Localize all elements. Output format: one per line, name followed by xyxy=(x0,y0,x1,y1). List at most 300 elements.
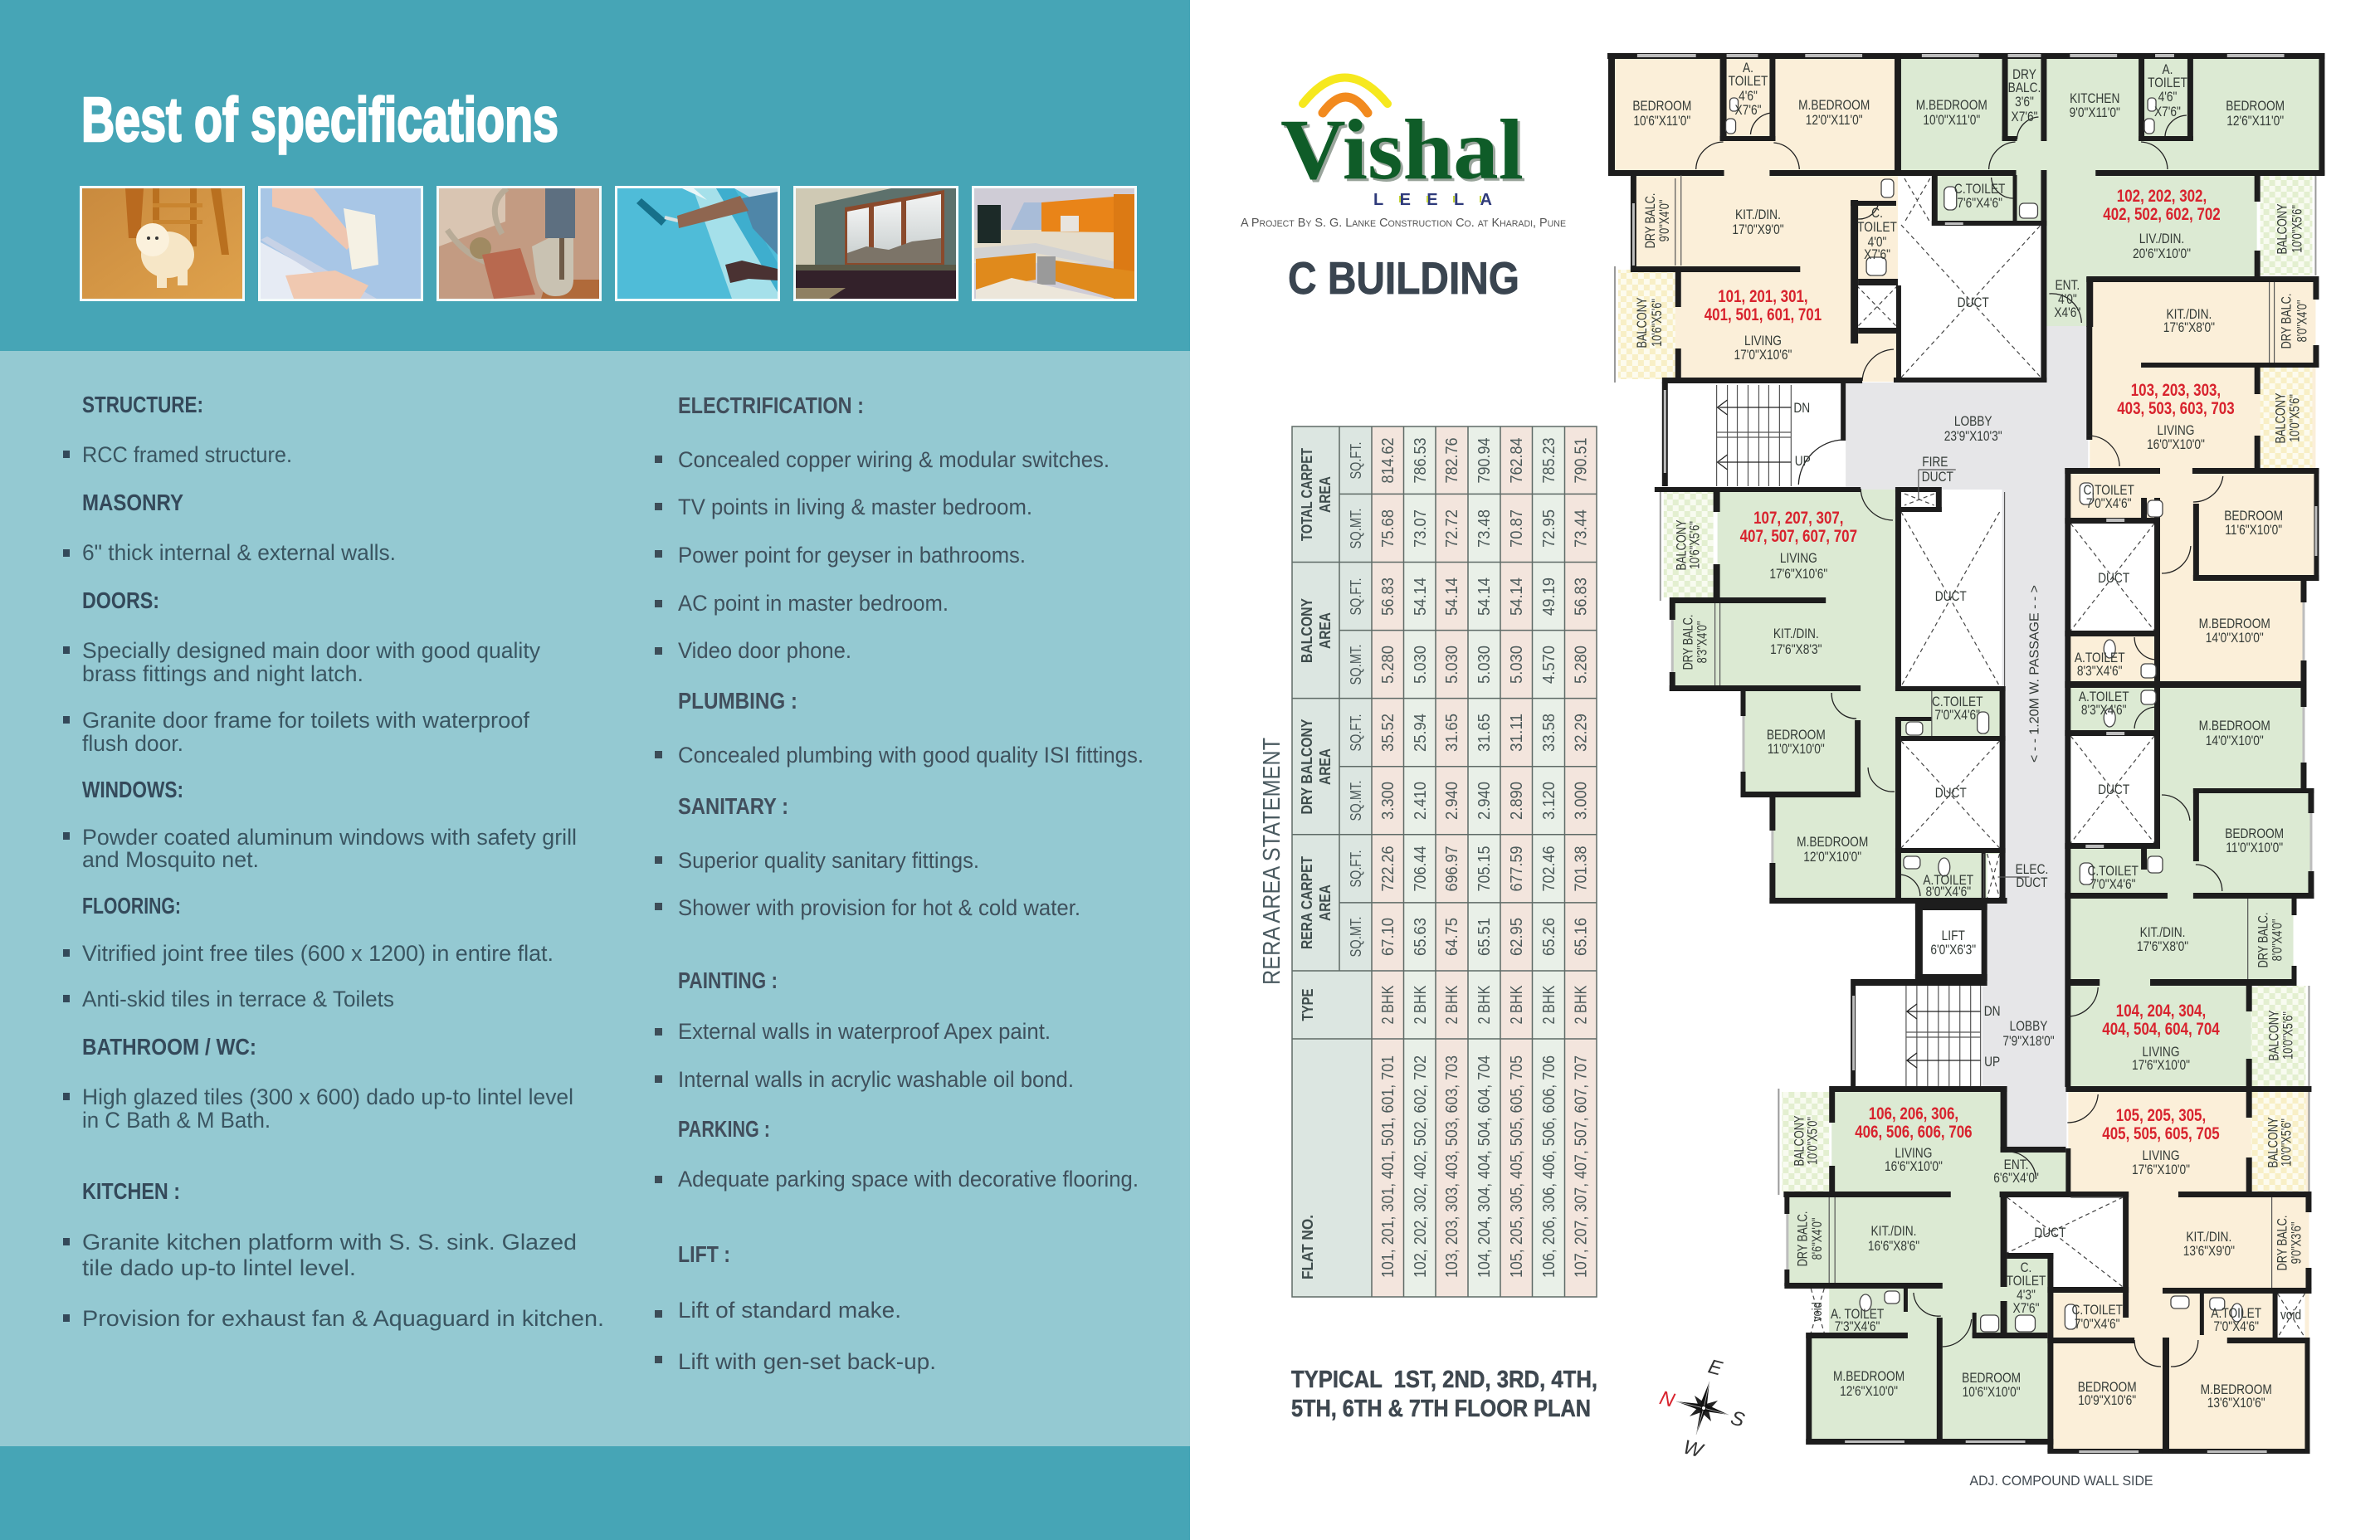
panel: specifications list background xyxy=(0,351,1190,1446)
room label: common toilet xyxy=(2071,1303,2123,1332)
specifications: right column xyxy=(655,392,1144,1374)
plan: windows xyxy=(1632,54,2317,1453)
room label: dry balcony: 8'0"X4'0" xyxy=(2270,919,2285,961)
plan: lobby and passage floor xyxy=(1846,326,2088,1148)
room label: common toilet: 4'0" xyxy=(1868,235,1886,250)
room label: living: 16'0"X10'0" xyxy=(2147,437,2205,452)
room label: balcony: BALCONY xyxy=(1634,298,1650,348)
room label: balcony: BALCONY xyxy=(2266,1011,2282,1060)
callout: fire duct xyxy=(1919,455,1956,500)
spec item: parking: Adequate parking space with decorative flooring. xyxy=(678,1167,1139,1192)
heading: windows: WINDOWS: xyxy=(82,777,183,802)
spec item: RCC: RCC framed structure. xyxy=(82,442,292,467)
room label: common toilet xyxy=(1932,694,1983,723)
flat numbers: 103 series: 103, 203, 303, xyxy=(2131,381,2221,401)
room label: dry balcony: 8'0"X4'0" xyxy=(2295,300,2310,342)
plan: balconies xyxy=(1615,175,2315,1195)
room label: kitchen dining: 17'0"X9'0" xyxy=(1732,222,1784,237)
table: row 102: 5.030 xyxy=(1412,646,1430,684)
room label: dry balcony xyxy=(1680,615,1710,670)
table: row 104: 54.14 xyxy=(1475,578,1494,616)
spec item: internal walls: Internal walls in acrylic washable oil bond. xyxy=(678,1067,1074,1092)
spec item: door frame: flush door. xyxy=(82,731,183,756)
table: row 104: 2 BHK xyxy=(1475,985,1494,1024)
room label: common toilet: 7'0"X4'6" xyxy=(2086,496,2132,511)
table: row 105: 2.890 xyxy=(1508,782,1526,820)
room label: kitchen dining: KIT./DIN. xyxy=(2186,1230,2231,1245)
room label: dry balcony xyxy=(2008,67,2041,124)
table: row 103: 31.65 xyxy=(1443,714,1461,752)
photo: switch installation xyxy=(258,186,423,301)
room label: kitchen dining: 13'6"X9'0" xyxy=(2183,1244,2235,1259)
flat numbers: 102 series xyxy=(2103,187,2221,225)
room label: attached toilet xyxy=(2079,690,2129,718)
room label: dry balcony: BALC. xyxy=(2008,80,2041,95)
spec item: main door: Specially designed main door with good quality xyxy=(82,638,540,663)
spec item: exhaust: Provision for exhaust fan & Aquaguard in kitchen. xyxy=(82,1306,604,1331)
room label: lift xyxy=(1930,928,1976,958)
table: column headers: SQ.MT. xyxy=(1348,644,1364,685)
room label: living: LIVING xyxy=(1895,1146,1932,1161)
room label: attached toilet: 8'0"X4'6" xyxy=(1925,885,1971,899)
table: column headers: BALCONY xyxy=(1299,598,1315,663)
room label: bedroom xyxy=(1632,99,1691,129)
logo: wordmark shadow: Vishal xyxy=(1283,105,1526,200)
room label: kitchen dining: KIT./DIN. xyxy=(1773,626,1819,641)
spec item: door frame: Granite door frame for toilets with waterproof xyxy=(82,708,529,733)
room label: balcony: 10'0"X5'6" xyxy=(2280,1011,2296,1060)
table: row 101: 67.10 xyxy=(1379,918,1397,956)
room label: bedroom: BEDROOM xyxy=(1632,99,1691,114)
table: row 105: 31.11 xyxy=(1508,714,1526,752)
table: row 106 xyxy=(1540,438,1558,1278)
plan: unit 104 floor xyxy=(2068,685,2311,1089)
room label: master bedroom: M.BEDROOM xyxy=(1916,98,1987,113)
spec item: kitchen platform xyxy=(63,1230,577,1280)
heading: flooring: FLOORING: xyxy=(82,893,181,919)
table: row 102: 65.63 xyxy=(1412,918,1430,956)
room label: attached toilet: 8'3"X4'6" xyxy=(2081,703,2127,718)
spec item: kitchen platform: tile dado up-to lintel level. xyxy=(82,1255,356,1280)
table: row 106: 3.120 xyxy=(1540,782,1558,820)
spec item: AC: AC point in master bedroom. xyxy=(678,591,949,616)
flat numbers: 106 series: 106, 206, 306, xyxy=(1869,1104,1958,1124)
room label: dry balcony: DRY BALC. xyxy=(1795,1211,1811,1266)
table: column headers: SQ.MT. xyxy=(1348,508,1364,549)
spec item: gen-set: Lift with gen-set back-up. xyxy=(678,1349,936,1374)
spec item: TV: TV points in living & master bedroom. xyxy=(678,495,1032,519)
room label: balcony: BALCONY xyxy=(1674,520,1690,570)
room label: bedroom xyxy=(2224,509,2283,538)
table: header background xyxy=(1292,426,1372,1297)
room label: lobby: 23'9"X10'3" xyxy=(1944,429,2002,444)
room label: lobby: LOBBY xyxy=(2010,1019,2047,1034)
table: row 105: 70.87 xyxy=(1508,509,1526,548)
label: void: void xyxy=(1810,1302,1826,1322)
room label: dry balcony: DRY BALC. xyxy=(1680,615,1696,670)
room label: living: 17'6"X10'0" xyxy=(2132,1162,2190,1177)
table: row 102: 786.53 xyxy=(1412,438,1430,483)
plan: unit 107 floor xyxy=(1673,490,2002,900)
plan: stairs xyxy=(1717,385,1981,1086)
table: column headers: AREA xyxy=(1317,476,1334,513)
photo: aluminium windows xyxy=(793,186,958,301)
spec item: sanitary fittings: Superior quality sanitary fittings. xyxy=(678,848,979,873)
room label: lobby xyxy=(1944,414,2002,444)
table: row 105: 762.84 xyxy=(1508,438,1526,483)
title: Best of specifications: Best of specifications xyxy=(81,85,558,154)
logo: orange arc xyxy=(1323,97,1368,113)
table: row 106: 702.46 xyxy=(1540,846,1558,891)
table: row 103: 2.940 xyxy=(1443,782,1461,820)
table: row 101: 2 BHK xyxy=(1379,985,1397,1024)
floor plan xyxy=(1607,53,2324,1454)
table: row stripes xyxy=(1372,426,1597,1297)
room label: bedroom: BEDROOM xyxy=(2225,826,2284,841)
room label: common toilet xyxy=(2087,864,2139,892)
room label: kitchen dining: KIT./DIN. xyxy=(2140,925,2185,940)
room label: living dining xyxy=(2133,231,2191,261)
spec item: lift make: Lift of standard make. xyxy=(678,1298,901,1323)
room label: balcony: 10'6"X5'6" xyxy=(1687,521,1703,569)
room label: bedroom: 10'6"X11'0" xyxy=(1633,114,1690,129)
table: column headers: SQ.FT. xyxy=(1348,850,1364,888)
table: row 103: 103, 203, 303, 403, 503, 603, 703 xyxy=(1443,1055,1461,1278)
duct label: DUCT xyxy=(2098,782,2130,797)
flat numbers: 107 series xyxy=(1740,509,1857,547)
table: row 105: 2 BHK xyxy=(1508,985,1526,1024)
room label: entrance: 6'6"X4'0" xyxy=(1993,1171,2039,1186)
plan: sanitary fixtures xyxy=(1726,98,2243,1332)
flat numbers: 106 series: 406, 506, 606, 706 xyxy=(1855,1123,1973,1143)
flat numbers: 106 series xyxy=(1855,1104,1973,1143)
room label: dry balcony: DRY BALC. xyxy=(2279,294,2295,348)
room label: living: LIVING xyxy=(1780,551,1817,566)
panel: specifications background xyxy=(0,0,1190,1540)
table: row 103: 72.72 xyxy=(1443,509,1461,548)
room label: common toilet: C.TOILET xyxy=(2071,1303,2123,1318)
room label: attached toilet: A.TOILET xyxy=(2079,690,2129,704)
callout: electrical duct: ELEC. xyxy=(2016,862,2048,877)
heading: structure: STRUCTURE: xyxy=(82,392,203,417)
room label: balcony: BALCONY xyxy=(2273,393,2289,443)
room label: attached toilet xyxy=(2075,651,2125,679)
table: row 103 xyxy=(1443,438,1461,1278)
table: row 104: 73.48 xyxy=(1475,509,1494,548)
icon: compass: E xyxy=(1706,1355,1725,1381)
table: row 106: 49.19 xyxy=(1540,578,1558,616)
room label: common toilet xyxy=(2007,1260,2046,1316)
room label: living: 17'6"X10'6" xyxy=(1769,567,1827,582)
room label: dry balcony: 3'6" xyxy=(2015,95,2034,110)
table: column headers: SQ.FT. xyxy=(1348,714,1364,752)
photo strip xyxy=(80,186,1137,301)
duct label: DUCT xyxy=(1935,589,1967,604)
room label: common toilet: C. xyxy=(1871,206,1883,221)
table: row 104 xyxy=(1475,438,1494,1278)
spec item: video door phone: Video door phone. xyxy=(678,638,851,663)
table: row 106: 4.570 xyxy=(1540,646,1558,684)
table: row 105 xyxy=(1508,438,1526,1278)
table: row 102: 2 BHK xyxy=(1412,985,1430,1024)
spec item: windows: Powder coated aluminum windows with safety grill xyxy=(82,825,577,850)
table: row 101: 101, 201, 301, 401, 501, 601, 701 xyxy=(1379,1055,1397,1278)
room label: attached toilet: A.TOILET xyxy=(2075,651,2125,665)
room label: living xyxy=(2132,1045,2190,1073)
room label: master bedroom: 12'0"X10'0" xyxy=(1803,850,1861,865)
table: row 107: 107, 207, 307, 407, 507, 607, 707 xyxy=(1572,1055,1590,1278)
room label: living xyxy=(1769,551,1827,582)
flat numbers: 107 series: 407, 507, 607, 707 xyxy=(1740,527,1857,547)
caption: typical floor plan xyxy=(1291,1367,1597,1422)
table: row 104: 2.940 xyxy=(1475,782,1494,820)
flat numbers: 107 series: 107, 207, 307, xyxy=(1753,509,1844,529)
room label: kitchen dining: 16'6"X8'6" xyxy=(1868,1239,1919,1254)
table: column headers: SQ.FT. xyxy=(1348,441,1364,480)
table: row 102: 73.07 xyxy=(1412,509,1430,548)
plan: unit 103 floor xyxy=(2068,279,2315,685)
plan: thin partitions xyxy=(1675,175,2275,1288)
room label: dry balcony: DRY xyxy=(2012,67,2036,82)
label: stairs down: DN xyxy=(1984,1004,2001,1019)
table: row 104: 5.030 xyxy=(1475,646,1494,684)
heading: kitchen: KITCHEN : xyxy=(82,1178,180,1204)
room label: balcony xyxy=(2275,204,2305,254)
room label: kitchen dining xyxy=(2163,307,2215,335)
caption: typical floor plan: TYPICAL 1ST, 2ND, 3RD, 4TH, xyxy=(1291,1367,1597,1393)
room label: common toilet: C.TOILET xyxy=(1932,694,1983,709)
room label: balcony xyxy=(1674,520,1703,570)
room label: attached toilet xyxy=(2211,1306,2262,1334)
room label: master bedroom xyxy=(1916,98,1987,128)
room label: balcony xyxy=(1792,1116,1821,1166)
room label: master bedroom xyxy=(2199,719,2270,748)
duct label: DUCT xyxy=(2034,1226,2066,1240)
room label: balcony: 10'0"X5'6" xyxy=(2287,394,2303,442)
flat numbers: 101 series: 401, 501, 601, 701 xyxy=(1705,305,1822,325)
room label: living: LIVING xyxy=(2143,1148,2179,1163)
room label: attached toilet: 7'3"X4'6" xyxy=(1835,1319,1880,1334)
room label: attached toilet: X7'6" xyxy=(2154,105,2181,119)
spec item: shower: Shower with provision for hot & cold water. xyxy=(678,895,1080,920)
table: row 102: 706.44 xyxy=(1412,846,1430,891)
room label: attached toilet: X7'6" xyxy=(1735,103,1761,118)
table: row 103: 2 BHK xyxy=(1443,985,1461,1024)
spec item: geyser: Power point for geyser in bathrooms. xyxy=(678,543,1026,568)
room label: master bedroom xyxy=(1833,1369,1904,1399)
room label: bedroom: BEDROOM xyxy=(1962,1371,2021,1386)
flat numbers: 105 series: 105, 205, 305, xyxy=(2116,1106,2206,1126)
spec item: windows: and Mosquito net. xyxy=(82,847,259,872)
table: column headers: AREA xyxy=(1317,748,1334,785)
room label: kitchen dining xyxy=(1770,626,1822,657)
room label: bedroom xyxy=(2225,826,2284,855)
plan: unit 106 floor xyxy=(1787,1089,2068,1442)
room label: common toilet: X7'6" xyxy=(2013,1301,2039,1316)
spec item: glazed tiles: High glazed tiles (300 x 600) dado up-to lintel level xyxy=(82,1084,573,1109)
room label: master bedroom xyxy=(1798,98,1870,128)
room label: entrance: ENT. xyxy=(2004,1157,2028,1172)
heading: doors: DOORS: xyxy=(82,587,159,613)
spec item: external walls: External walls in waterproof Apex paint. xyxy=(678,1019,1051,1044)
room label: balcony: 10'0"X5'0" xyxy=(1805,1117,1821,1165)
heading: electrification: ELECTRIFICATION : xyxy=(678,392,864,418)
room label: dry balcony: DRY BALC. xyxy=(2256,913,2271,967)
room label: dry balcony: DRY BALC. xyxy=(2275,1216,2290,1270)
room label: dry balcony: 8'3"X4'0" xyxy=(1695,621,1710,663)
spec item: anti-skid: Anti-skid tiles in terrace & Toilets xyxy=(82,987,394,1011)
callout: fire duct: FIRE xyxy=(1922,455,1948,470)
spec item: main door xyxy=(63,638,540,686)
flat numbers: 105 series: 405, 505, 605, 705 xyxy=(2102,1124,2220,1144)
room label: bedroom xyxy=(1962,1371,2021,1400)
table: column headers: SQ.MT. xyxy=(1348,916,1364,958)
plan: unit 105 floor xyxy=(2050,1089,2309,1452)
room label: kitchen dining: 17'6"X8'3" xyxy=(1770,642,1822,657)
room label: common toilet: 7'0"X4'6" xyxy=(2075,1317,2120,1332)
table: row 103: 782.76 xyxy=(1443,438,1461,483)
caption: typical floor plan: 5TH, 6TH & 7TH FLOOR PLAN xyxy=(1291,1396,1591,1422)
table: row 107: 65.16 xyxy=(1572,918,1590,956)
flat numbers: 104 series: 104, 204, 304, xyxy=(2116,1001,2206,1021)
table: row 106: 65.26 xyxy=(1540,918,1558,956)
room label: common toilet: 7'0"X4'6" xyxy=(2090,877,2135,892)
room label: balcony: BALCONY xyxy=(2275,204,2290,254)
heading: sanitary: SANITARY : xyxy=(678,793,788,819)
room label: living xyxy=(2147,423,2205,452)
room label: attached toilet: A. TOILET xyxy=(1831,1307,1885,1322)
room label: dry balcony xyxy=(2256,913,2285,967)
heading: parking: PARKING : xyxy=(678,1116,770,1142)
room label: bedroom xyxy=(1767,728,1826,757)
room label: kitchen dining xyxy=(2137,925,2188,954)
table: row 103: 696.97 xyxy=(1443,846,1461,891)
room label: attached toilet: A.TOILET xyxy=(1923,873,1974,888)
room label: attached toilet xyxy=(1729,61,1768,118)
room label: common toilet: C. xyxy=(2021,1260,2031,1275)
table: row 101: 75.68 xyxy=(1379,509,1397,548)
flat numbers: 103 series xyxy=(2117,381,2235,419)
room label: living: LIVING xyxy=(2157,423,2194,438)
table: column headers: AREA xyxy=(1317,885,1334,921)
plan: door swings xyxy=(1696,113,2223,1367)
room label: kitchen dining xyxy=(2183,1230,2235,1259)
photo: painter with roller xyxy=(615,186,780,301)
photo: puppy on wooden floor xyxy=(80,186,245,301)
room label: bedroom: BEDROOM xyxy=(1767,728,1826,743)
room label: bedroom: 11'6"X10'0" xyxy=(2225,523,2282,538)
table: row 107: 32.29 xyxy=(1572,714,1590,752)
room label: entrance xyxy=(2054,278,2080,320)
room label: common toilet xyxy=(2083,483,2134,511)
room label: attached toilet: TOILET xyxy=(1729,74,1768,89)
logo: Vishal Leela xyxy=(1241,78,1566,230)
table: row 106: 106, 206, 306, 406, 506, 606, 706 xyxy=(1540,1055,1558,1278)
spec item: glazed tiles xyxy=(63,1084,573,1133)
room label: master bedroom: M.BEDROOM xyxy=(1798,98,1870,113)
table: row 101: 814.62 xyxy=(1379,438,1397,483)
room label: balcony xyxy=(2273,393,2303,443)
spec item: door frame xyxy=(63,708,529,756)
table: row 106: 33.58 xyxy=(1540,714,1558,752)
duct label: DUCT xyxy=(1958,295,1989,310)
room label: attached toilet: A. xyxy=(1743,61,1753,76)
room label: bedroom xyxy=(2226,99,2285,129)
plan: duct shafts xyxy=(1811,175,2304,1338)
room label: master bedroom xyxy=(1797,835,1868,865)
room label: kitchen dining: KIT./DIN. xyxy=(1871,1224,1916,1239)
table: row 107: 56.83 xyxy=(1572,578,1590,616)
table: row 102: 54.14 xyxy=(1412,578,1430,616)
table: row 107: 701.38 xyxy=(1572,846,1590,891)
room label: attached toilet: A. xyxy=(2162,62,2173,77)
room label: living xyxy=(1885,1146,1943,1174)
table: row 103: 64.75 xyxy=(1443,918,1461,956)
room label: living: 16'6"X10'0" xyxy=(1885,1159,1943,1174)
room label: lift: 6'0"X6'3" xyxy=(1930,943,1976,958)
room label: common toilet: 4'3" xyxy=(2017,1288,2036,1303)
room label: dry balcony: 9'0"X4'0" xyxy=(1656,200,1672,241)
labels: unit 104 rooms xyxy=(2079,690,2296,1073)
room label: common toilet: X7'6" xyxy=(1864,247,1890,262)
icon: compass xyxy=(1657,1355,1747,1463)
label: stairs down: DN xyxy=(1793,401,1810,416)
caption: compound wall side: ADJ. COMPOUND WALL SIDE xyxy=(1970,1473,2153,1489)
room label: master bedroom xyxy=(2201,1382,2272,1411)
room label: dry balcony: DRY BALC. xyxy=(1642,193,1658,248)
table: row 104: 790.94 xyxy=(1475,438,1494,483)
room label: bedroom: 10'6"X10'0" xyxy=(1963,1385,2021,1400)
room label: living xyxy=(2132,1148,2190,1177)
spec item: wiring: Concealed copper wiring & modular switches. xyxy=(678,447,1110,472)
room label: bedroom: 11'0"X10'0" xyxy=(2226,841,2283,855)
room label: living: LIVING xyxy=(2143,1045,2179,1060)
table: row 104: 705.15 xyxy=(1475,846,1494,891)
room label: attached toilet: A.TOILET xyxy=(2211,1306,2262,1321)
table: row 106: 785.23 xyxy=(1540,438,1558,483)
room label: balcony: BALCONY xyxy=(2265,1118,2281,1167)
table: row 105: 105, 205, 305, 405, 505, 605, 705 xyxy=(1508,1055,1526,1278)
table: column headers: SQ.MT. xyxy=(1348,780,1364,821)
room label: master bedroom: M.BEDROOM xyxy=(1833,1369,1904,1384)
room label: master bedroom: 12'6"X10'0" xyxy=(1840,1384,1898,1399)
photo: modular kitchen xyxy=(972,186,1137,301)
room label: entrance: 4'0" xyxy=(2058,292,2077,307)
spec item: walls: 6" thick internal & external walls. xyxy=(82,540,396,565)
specifications: left column xyxy=(63,392,604,1331)
heading: painting: PAINTING : xyxy=(678,967,778,993)
logo: project line: A Project By S. G. Lanke Construction Co. at Kharadi, Pune xyxy=(1241,216,1566,230)
table: row 103: 54.14 xyxy=(1443,578,1461,616)
room label: master bedroom: M.BEDROOM xyxy=(2201,1382,2272,1397)
room label: lobby: LOBBY xyxy=(1954,414,1992,429)
table: row 101 xyxy=(1379,438,1397,1278)
room label: kitchen dining xyxy=(1732,207,1784,237)
photo: plumbing trap xyxy=(436,186,602,301)
table: RERA area statement xyxy=(1292,426,1597,1297)
room label: common toilet: 7'6"X4'6" xyxy=(1957,196,2002,211)
room label: living dining: LIV./DIN. xyxy=(2139,231,2184,246)
room label: master bedroom: M.BEDROOM xyxy=(2199,719,2270,733)
flat numbers: 103 series: 403, 503, 603, 703 xyxy=(2117,399,2235,419)
heading: plumbing: PLUMBING : xyxy=(678,688,797,714)
room label: living xyxy=(1734,334,1792,363)
plan: unit 102 floor xyxy=(1898,55,2321,326)
spec item: glazed tiles: in C Bath & M Bath. xyxy=(82,1108,271,1133)
label: stairs up: UP xyxy=(1795,454,1811,469)
room label: master bedroom: 10'0"X11'0" xyxy=(1923,113,1980,128)
room label: master bedroom: 13'6"X10'6" xyxy=(2207,1396,2265,1411)
